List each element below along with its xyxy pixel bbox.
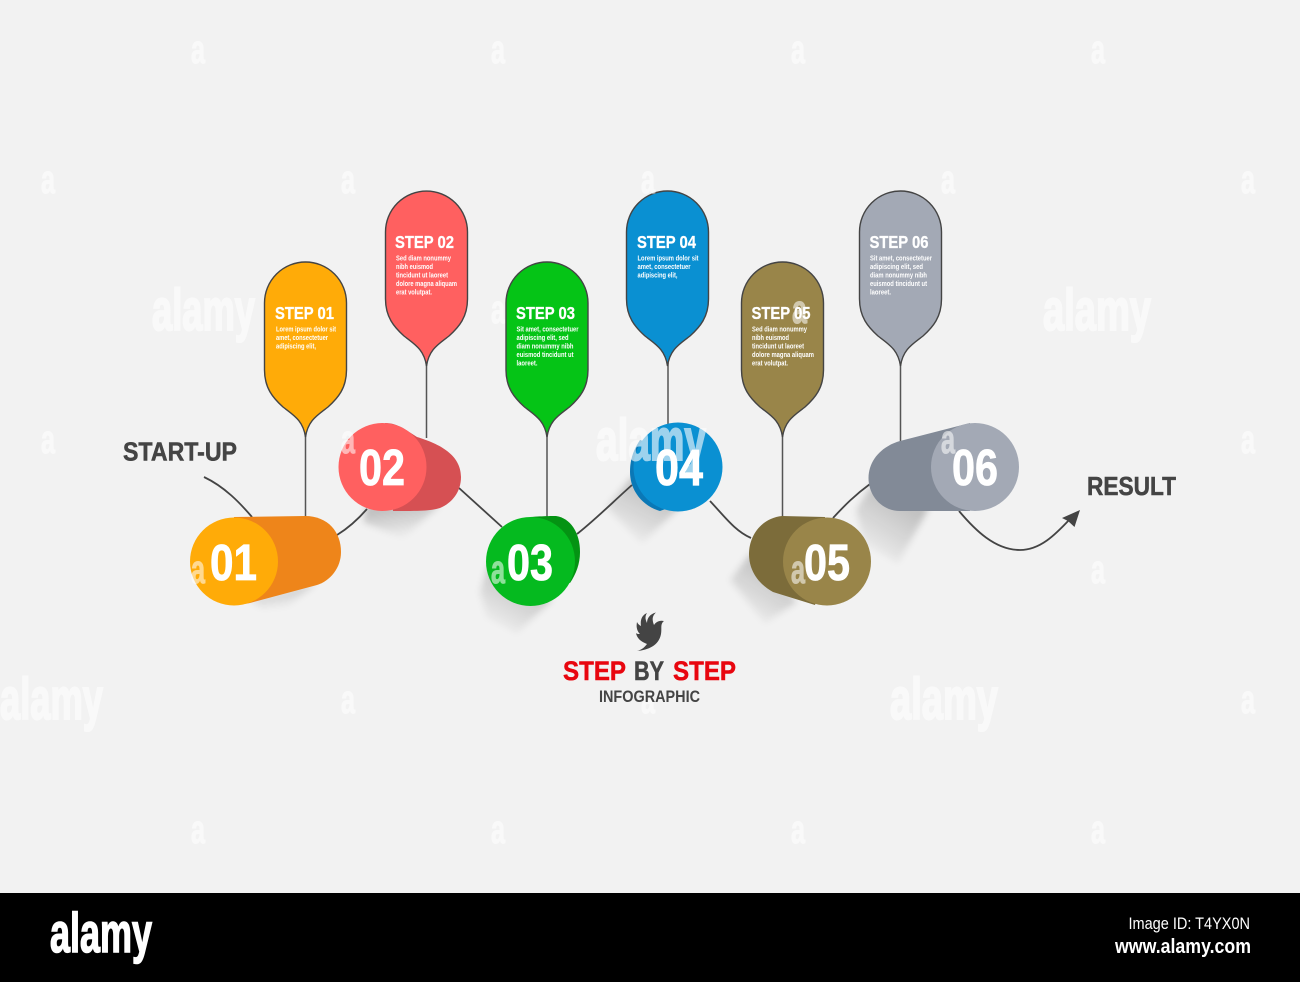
pin: step 01: STEP 01 bbox=[275, 303, 334, 323]
pin: step 05: tincidunt ut laoreet bbox=[752, 344, 805, 350]
watermarks: a bbox=[491, 288, 505, 332]
watermarks: a bbox=[791, 808, 805, 852]
watermarks: a bbox=[341, 678, 355, 722]
pin: step 05: STEP 05 bbox=[752, 303, 811, 323]
pin: step 05: erat volutpat. bbox=[752, 360, 788, 368]
pin: step 02: STEP 02 bbox=[395, 232, 454, 252]
pin: step 03: Sit amet, consectetuer bbox=[516, 326, 579, 334]
pin: step 05: nibh euismod bbox=[752, 335, 789, 342]
pin: step 06: Sit amet, consectetuer bbox=[870, 256, 932, 262]
pin: step 02: erat volutpat. bbox=[396, 290, 432, 296]
watermarks: a bbox=[491, 808, 505, 852]
pin: step 06: euismod tincidunt ut bbox=[870, 281, 928, 288]
pin: step 04: a bbox=[641, 158, 655, 202]
cylinder 04 bbox=[596, 408, 722, 512]
watermarks: alamy bbox=[0, 667, 103, 732]
pin: step 05: a bbox=[792, 288, 808, 332]
watermarks: a bbox=[1091, 548, 1105, 592]
pin: step 06: adipiscing elit, sed bbox=[870, 264, 923, 271]
pin: step 03 bbox=[506, 262, 588, 437]
connecting line bbox=[204, 477, 1070, 550]
pin: step 06 bbox=[859, 191, 942, 366]
title: step: STEP bbox=[563, 656, 626, 686]
watermarks: a bbox=[41, 158, 55, 202]
pin: step 06: diam nonummy nibh bbox=[870, 272, 927, 280]
cylinder 03 bbox=[486, 516, 580, 606]
watermarks: a bbox=[191, 808, 205, 852]
cylinder 06 bbox=[868, 418, 1019, 511]
cylinder 06: a bbox=[941, 418, 955, 462]
watermarks: a bbox=[41, 418, 55, 462]
stems bbox=[306, 363, 900, 517]
watermarks: a bbox=[941, 158, 955, 202]
footer bar: www.alamy.com bbox=[1114, 936, 1251, 958]
pin: step 04: Lorem ipsum dolor sit bbox=[638, 256, 699, 262]
icon: bird logo bbox=[636, 612, 664, 651]
watermarks: a bbox=[491, 28, 505, 72]
pin: step 03: diam nonummy nibh bbox=[516, 344, 574, 350]
pin: step 01: Lorem ipsum dolor sit bbox=[276, 326, 337, 334]
pin: step 04: amet, consectetuer bbox=[638, 264, 691, 271]
cast shadows bbox=[250, 477, 929, 633]
cylinder 05 bbox=[749, 516, 871, 606]
footer bar: alamy bbox=[50, 901, 152, 964]
result label: RESULT bbox=[1087, 471, 1176, 501]
pin: step 04: adipiscing elit, bbox=[638, 272, 678, 280]
watermarks: alamy bbox=[890, 667, 998, 732]
watermarks: a bbox=[1241, 158, 1255, 202]
pin: step 01 bbox=[264, 262, 346, 437]
cylinder 04: alamy bbox=[596, 408, 706, 473]
pin: step 02: tincidunt ut laoreet bbox=[396, 272, 449, 280]
cylinder 01: a bbox=[191, 548, 205, 592]
pin: step 05: Sed diam nonummy bbox=[752, 326, 807, 334]
pin: step 03: euismod tincidunt ut bbox=[516, 352, 574, 359]
start-up label: START-UP bbox=[123, 436, 237, 466]
pin: step 02 bbox=[386, 191, 468, 366]
footer bar: Image ID: T4YX0N bbox=[1128, 914, 1250, 933]
pin: step 03: laoreet. bbox=[516, 360, 538, 368]
footer bar bbox=[0, 893, 1300, 982]
cylinder 01 bbox=[190, 516, 341, 606]
pin: step 01: amet, consectetuer bbox=[276, 335, 328, 342]
pin: step 06: laoreet. bbox=[870, 290, 891, 296]
pin: step 02: nibh euismod bbox=[396, 264, 433, 271]
title: by: BY bbox=[634, 656, 664, 686]
arrow head bbox=[1062, 510, 1080, 527]
cylinder 05: 05 bbox=[804, 534, 850, 591]
watermarks: a bbox=[1241, 418, 1255, 462]
pin: step 01: adipiscing elit, bbox=[276, 344, 316, 350]
pin: step 02: dolore magna aliquam bbox=[396, 281, 457, 288]
cylinder 02 bbox=[338, 418, 461, 511]
cylinder 01: 01 bbox=[210, 534, 257, 591]
title: step: STEP bbox=[673, 656, 736, 686]
pin: step 05 bbox=[742, 262, 824, 437]
cylinder 05: a bbox=[791, 548, 805, 592]
watermarks: alamy bbox=[152, 278, 255, 343]
pin: step 04 bbox=[626, 158, 708, 366]
cylinder 02: a bbox=[341, 418, 355, 462]
watermarks: a bbox=[1091, 28, 1105, 72]
watermarks: a bbox=[191, 28, 205, 72]
cylinder 02: 02 bbox=[359, 439, 405, 496]
cylinder 03: 03 bbox=[507, 534, 553, 591]
cylinder 03: a bbox=[491, 548, 505, 592]
pin: step 03: STEP 03 bbox=[516, 303, 575, 323]
cylinder 04: 04 bbox=[655, 439, 704, 496]
pin: step 06: STEP 06 bbox=[870, 232, 929, 252]
watermarks: a bbox=[791, 28, 805, 72]
pin: step 02: Sed diam nonummy bbox=[396, 256, 451, 262]
cylinder 06: 06 bbox=[952, 439, 998, 496]
watermarks: a bbox=[341, 158, 355, 202]
subtitle: INFOGRAPHIC bbox=[599, 687, 700, 706]
watermarks: alamy bbox=[1043, 278, 1151, 343]
watermarks: a bbox=[1091, 808, 1105, 852]
pin: step 05: dolore magna aliquam bbox=[752, 352, 814, 359]
watermarks: a bbox=[1241, 678, 1255, 722]
pin: step 03: adipiscing elit, sed bbox=[516, 335, 568, 342]
watermarks: a bbox=[641, 678, 655, 722]
pin: step 04: STEP 04 bbox=[637, 232, 696, 252]
